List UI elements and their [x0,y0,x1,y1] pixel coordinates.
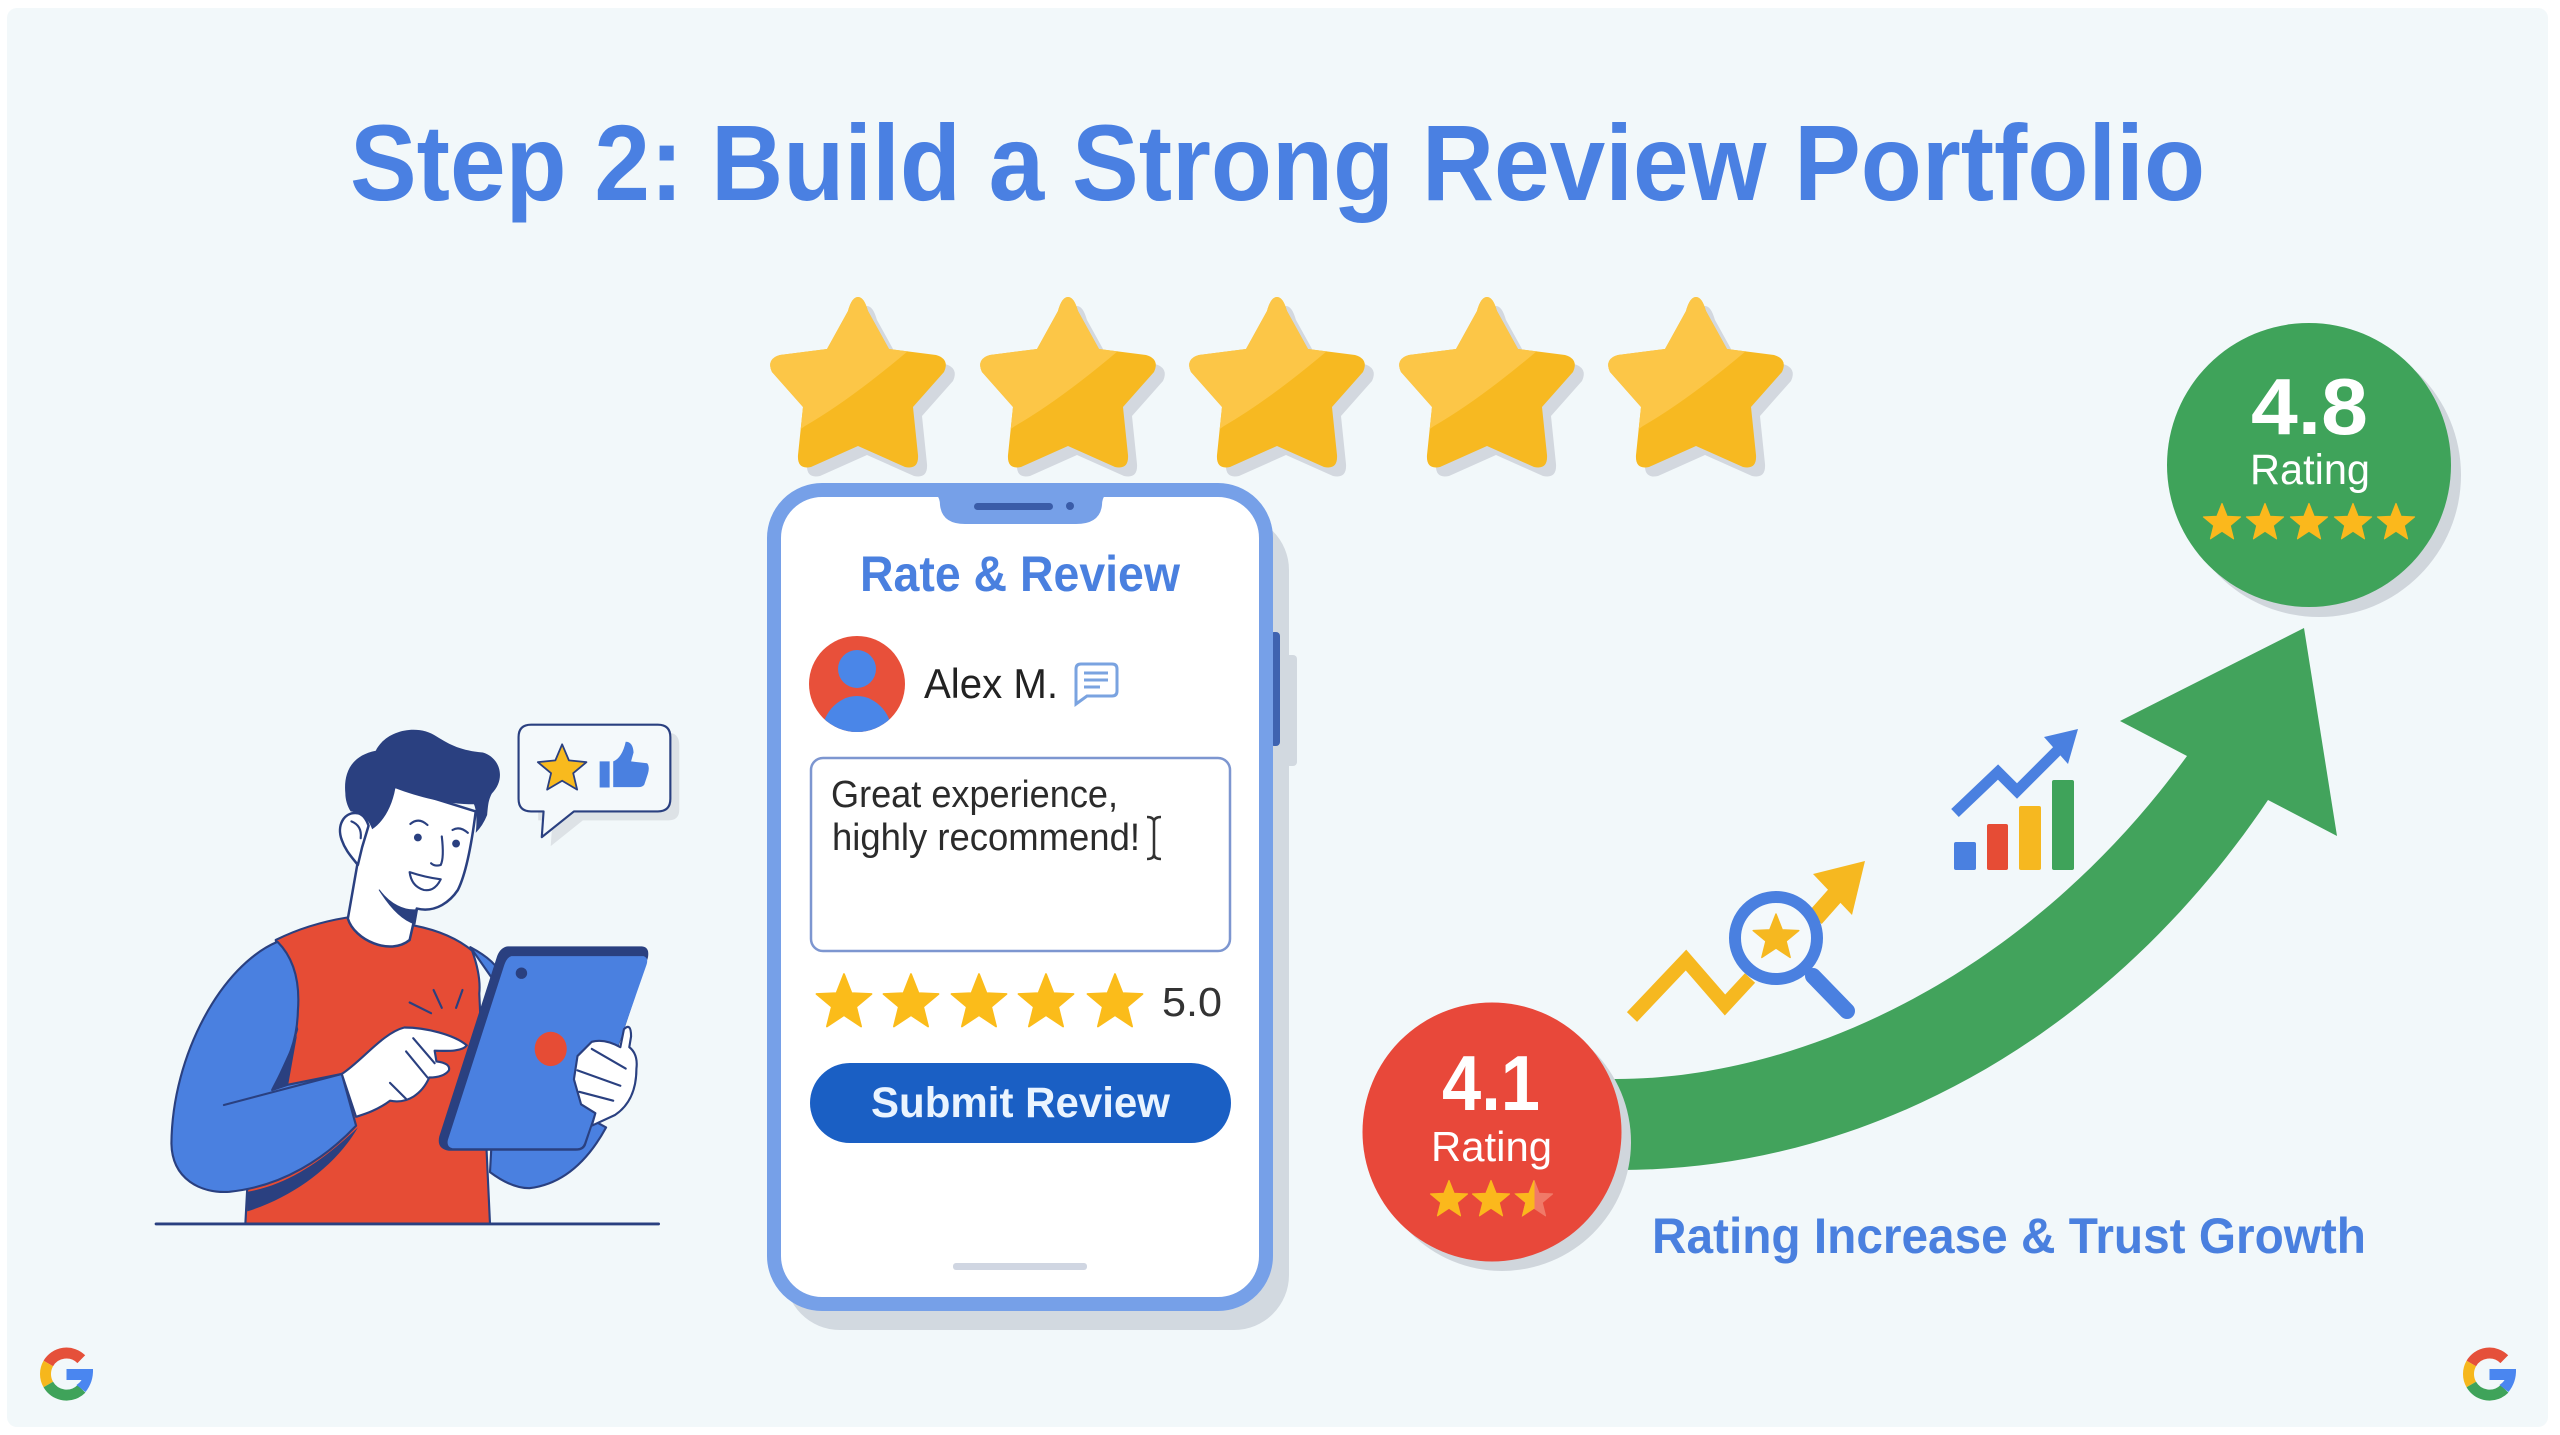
camera dot [1066,502,1074,510]
side shadow bump [1280,655,1297,766]
badge: 4.1 rating [1362,1002,1631,1271]
speech bubble shadow [538,733,679,846]
magnifier handle [1813,976,1847,1011]
badge circle [2167,323,2451,607]
badge stars [1430,1180,1553,1216]
ground line [156,1220,659,1228]
phone shadow [785,515,1289,1330]
arm shadows [247,1035,358,1211]
lens star [1753,914,1799,957]
badge label: Rating [2250,446,2370,494]
icon: google logo left [45,1353,93,1395]
submit button [810,1063,1231,1143]
holding hand [574,1027,637,1126]
badge label: Rating [1431,1123,1552,1170]
rating score: 5.0 [1162,979,1222,1025]
ear [340,813,369,865]
side button [1270,632,1280,746]
illustration: person using tablet [156,725,679,1224]
badge score: 4.8 [2251,362,2368,451]
avatar [809,636,905,732]
neck and face [348,786,476,947]
badge shadow [2177,333,2461,617]
badge: 4.8 rating [2167,323,2461,617]
growth arrow [1600,628,2337,1170]
near arm sleeve [171,942,356,1192]
yellow trend line [1632,960,1750,1017]
home indicator [953,1263,1087,1270]
review text line one: Great experience, [831,774,1118,816]
tablet face [448,956,647,1148]
pointing hand [342,1027,467,1117]
icon: comment [1076,664,1117,704]
phone mockup [774,489,1297,1330]
bubble star [538,744,586,790]
far arm [470,947,606,1188]
icon: google logo right [2468,1353,2516,1395]
face details [351,821,468,890]
icon: magnifier with trend line [1632,861,1865,1017]
speech bubble [519,725,670,837]
caption: Rating Increase & Trust Growth [1652,1208,2366,1264]
tablet body [439,946,648,1151]
five large gold stars [770,297,1793,476]
badge shadow [1373,1013,1631,1271]
icon: bar chart with rising line [1954,729,2078,870]
button label: Submit Review [871,1079,1171,1127]
bubble thumbs up [600,742,649,787]
sleeve fold [224,1074,342,1105]
rating stars row [816,974,1143,1026]
text cursor [1147,817,1161,859]
heading: Rate & Review [860,546,1180,602]
phone frame [774,490,1266,1304]
user name: Alex M. [924,660,1058,707]
speaker [974,503,1053,510]
badge score: 4.1 [1442,1039,1540,1127]
yellow arrow [1815,892,1838,918]
review text line two: highly recommend! [832,817,1140,859]
tablet camera and red dot [516,967,527,979]
tap burst lines [410,990,462,1013]
badge circle [1362,1002,1622,1262]
hair [345,730,500,833]
title: Step 2: Build a Strong Review Portfolio [350,102,2205,223]
review text box [811,758,1230,951]
magnifier lens [1735,897,1817,979]
badge stars [2203,504,2415,539]
notch [926,489,1116,524]
red shirt [245,917,490,1224]
chin shadow [379,890,417,924]
